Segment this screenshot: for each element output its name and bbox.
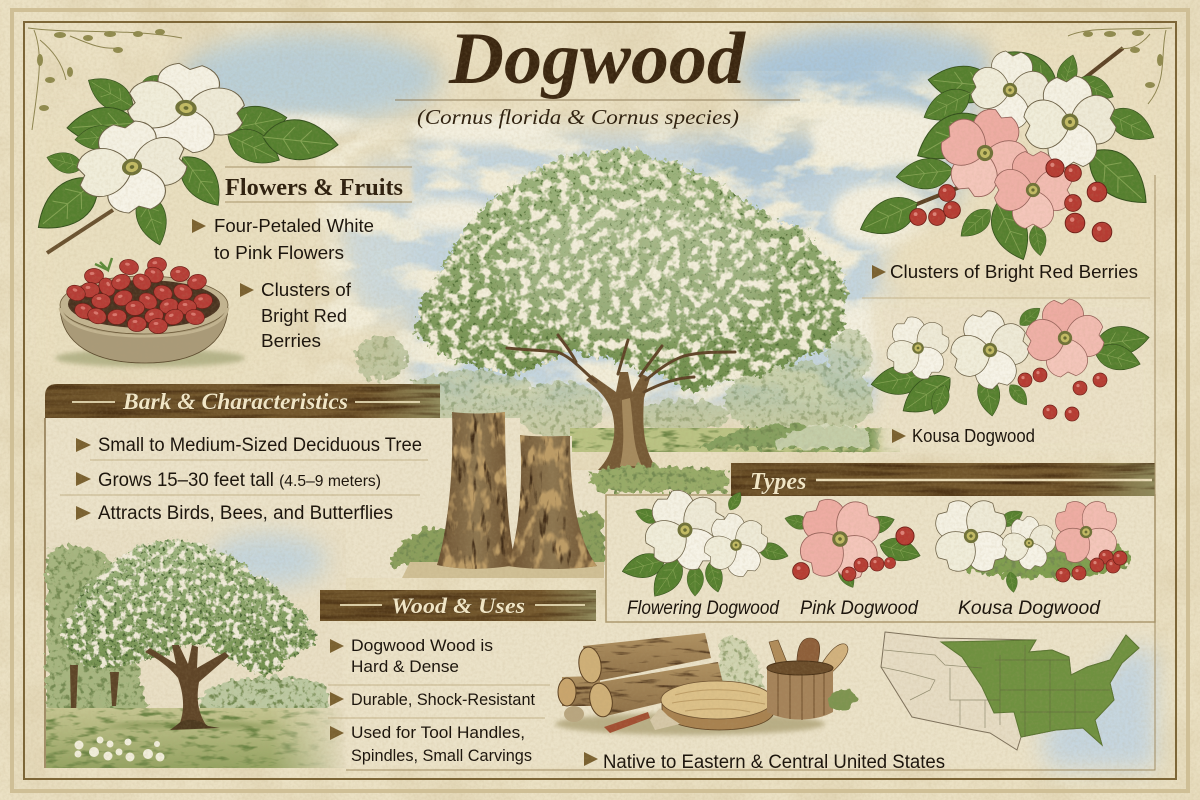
illustration: kousa flower spray <box>869 296 1151 424</box>
type labels: Flowering Dogwood <box>627 598 780 619</box>
header band: Wood & Uses <box>391 593 525 618</box>
bullet: hard: Hard & Dense <box>351 657 459 676</box>
corner vine: top right <box>1068 28 1172 104</box>
bullet: four-petaled flowers: to Pink Flowers <box>214 243 344 263</box>
blossom highlight <box>505 200 775 340</box>
header band <box>320 590 596 621</box>
panel: bottom parchment strip <box>342 622 1155 768</box>
distant landscape and meadow <box>356 329 900 452</box>
type labels: Kousa Dogwood <box>958 598 1101 619</box>
bullet: clusters of bright red berries (left) <box>240 280 352 351</box>
bullet: kousa dogwood: Kousa Dogwood <box>912 426 1035 446</box>
tree stumps scene <box>392 412 604 578</box>
lower log <box>587 662 724 719</box>
panel: Bark & Characteristics <box>45 384 440 768</box>
panel: left column parchment behind lists and stumps <box>45 418 605 578</box>
main dogwood tree <box>412 148 847 492</box>
wood logs and tools <box>555 633 857 735</box>
whole US outline <box>881 632 1139 750</box>
header band <box>731 463 1155 496</box>
stump left <box>437 412 516 569</box>
bullet: height: Grows 15–30 feet tall (4.5–9 meters) <box>98 470 381 491</box>
pot with tools <box>767 638 848 720</box>
flowering dogwood <box>619 475 790 603</box>
subtitle: (Cornus florida & Cornus species) <box>417 105 739 129</box>
trunk and branches <box>507 335 735 470</box>
panel: Flowers & Fruits backdrop <box>30 120 290 385</box>
panel: Types <box>606 463 1155 622</box>
map of the United States <box>881 632 1139 750</box>
title: Dogwood <box>448 18 746 100</box>
cut disc <box>661 681 773 730</box>
right panel: parchment behind top cluster <box>880 30 1160 290</box>
sky tint behind the map <box>1040 650 1155 768</box>
state lines <box>881 645 1110 737</box>
types panel background <box>606 495 1155 622</box>
native range in green <box>941 635 1139 745</box>
right panel: pale backing <box>870 296 1155 455</box>
heading: Flowers & Fruits <box>225 167 412 202</box>
bullet: four-petaled flowers: Four-Petaled White <box>214 216 374 236</box>
bullet: clusters of bright red berries (right): Clusters of Bright Red Berries <box>890 262 1138 282</box>
bullet: clusters of bright red berries (left): Bright Red <box>261 306 347 326</box>
kousa dogwood <box>917 482 1133 593</box>
pink dogwood <box>781 480 923 598</box>
bullet: hard <box>330 636 493 676</box>
heading: Flowers & Fruits: Flowers & Fruits <box>225 175 403 201</box>
corner vine: top left <box>28 28 182 130</box>
type labels: Pink Dogwood <box>800 598 919 619</box>
stone and small wood pieces <box>564 706 680 733</box>
bullet: hard: Dogwood Wood is <box>351 636 493 655</box>
sky and clouds <box>180 30 1000 410</box>
illustration: top-right flower cluster with berries <box>854 39 1161 266</box>
canopy <box>412 148 847 388</box>
illustration: top-left white flowers <box>26 58 340 253</box>
bullet: size: Small to Medium-Sized Deciduous Tree <box>98 435 422 456</box>
bullet: tools: Used for Tool Handles, <box>351 723 525 742</box>
bullet: tools <box>330 723 532 765</box>
bottom-left landscape with tree <box>46 530 348 768</box>
upper log <box>577 633 711 684</box>
bullet: durable: Durable, Shock-Resistant <box>351 690 535 709</box>
header band <box>45 384 440 418</box>
bullet: clusters of bright red berries (left): Berries <box>261 331 321 351</box>
panel: Wood & Uses <box>320 590 596 765</box>
bullet: clusters of bright red berries (left): Clusters of <box>261 280 352 300</box>
stump right <box>508 435 597 569</box>
type labels <box>627 598 1101 619</box>
illustration: bowl of berries <box>55 257 245 367</box>
header band: Types <box>750 469 806 495</box>
bullet: native range: Native to Eastern & Central United States <box>603 752 945 773</box>
bullet: wildlife: Attracts Birds, Bees, and Butterflies <box>98 503 393 524</box>
bullet: tools: Spindles, Small Carvings <box>351 746 532 765</box>
bullet: four-petaled flowers <box>192 216 374 263</box>
header band: Bark & Characteristics <box>122 389 348 414</box>
grass at trunk base <box>590 465 728 492</box>
small back log <box>558 676 600 706</box>
